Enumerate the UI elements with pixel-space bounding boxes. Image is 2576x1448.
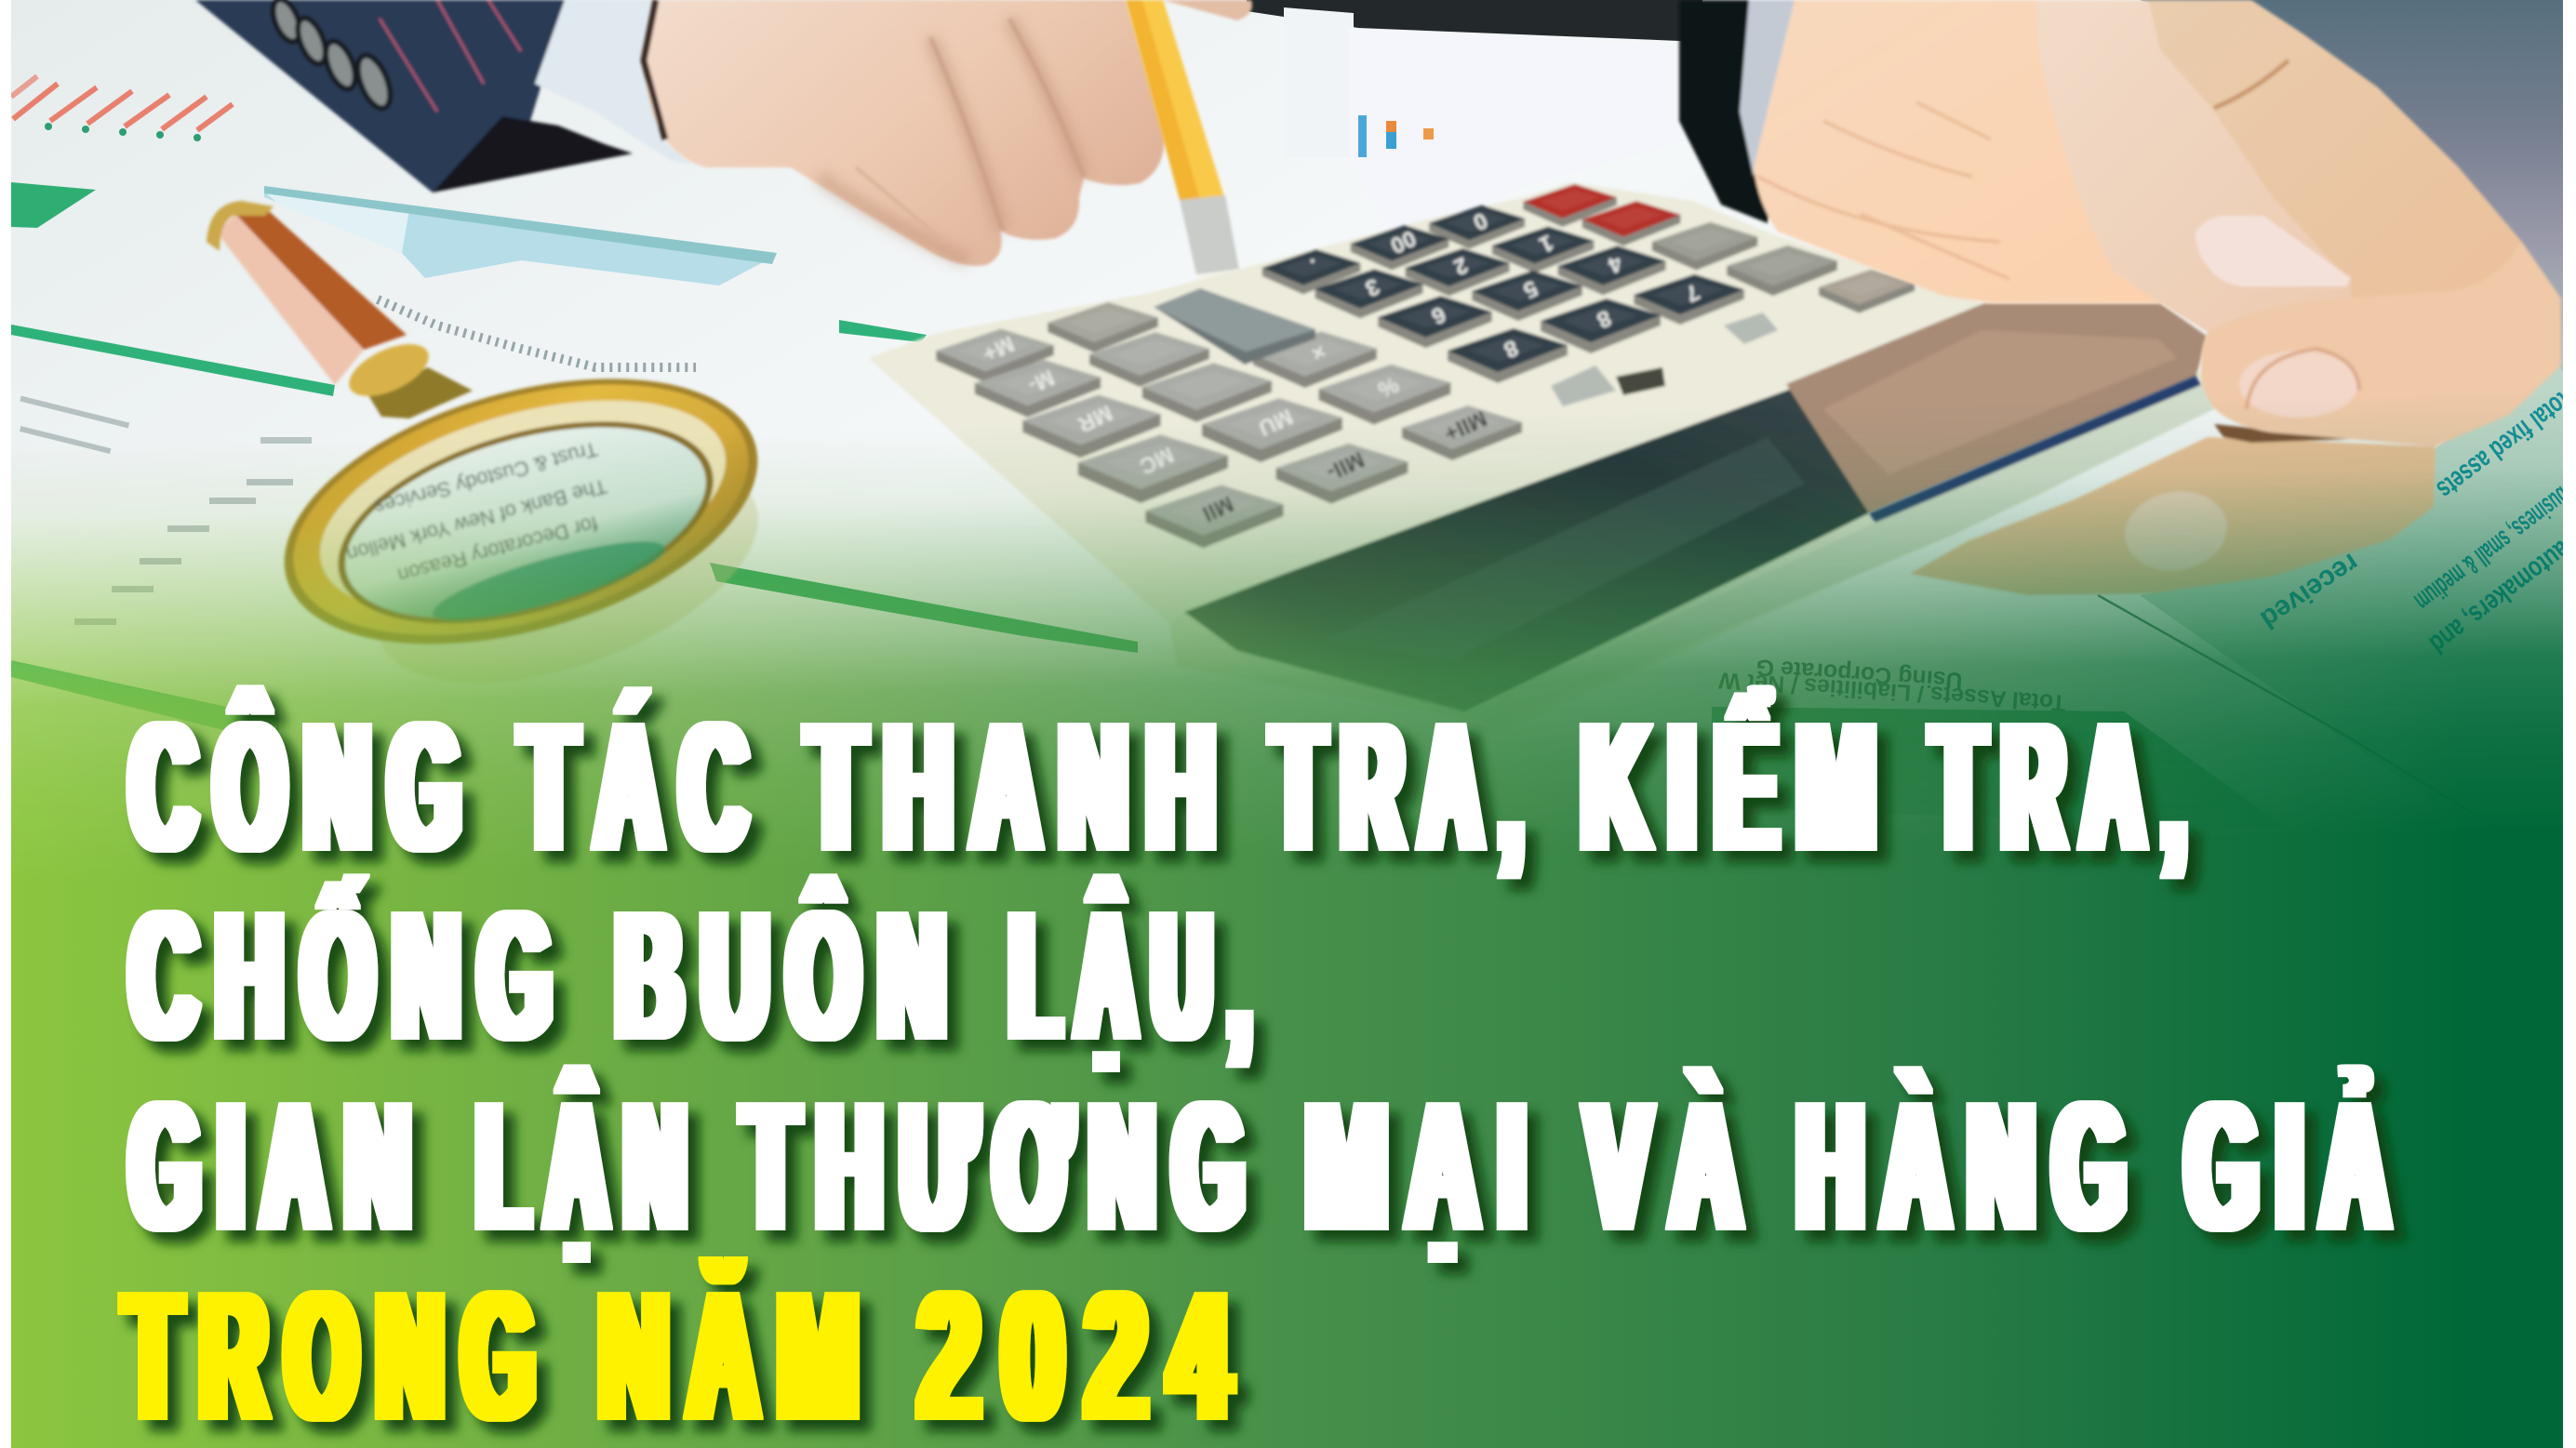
title line 3: HÀNG xyxy=(1797,1064,2144,1269)
corporate table text: Total Assets / Liabilities / Net W xyxy=(1717,667,2066,716)
title line 3 xyxy=(130,1064,2408,1269)
red and green mini bars top-left xyxy=(11,76,233,141)
key labels: . xyxy=(1306,253,1323,278)
finger creases xyxy=(930,19,1084,231)
key labels: 8 xyxy=(1593,305,1615,333)
key labels: MU xyxy=(1255,404,1297,441)
key labels: M- xyxy=(1024,365,1059,398)
jacket pinstripes xyxy=(380,0,521,112)
right paper rotated text: total fixed assets xyxy=(2431,385,2576,505)
blue edge xyxy=(1869,376,2201,523)
title: TRA, xyxy=(1932,684,2204,889)
key labels: 6 xyxy=(1427,301,1449,329)
finger shading xyxy=(819,19,1084,260)
ferrule xyxy=(368,367,473,418)
palm xyxy=(1754,0,2270,316)
key labels: % xyxy=(1374,371,1403,403)
silver edge xyxy=(1465,385,2214,725)
pencil xyxy=(1126,0,1243,307)
lower finger nail xyxy=(2119,484,2233,578)
title line 2: CHỐNG xyxy=(130,874,570,1077)
title line 1 xyxy=(130,684,2204,889)
magnifying glass xyxy=(207,201,788,728)
lens text lines: The Bank of New York Mellon xyxy=(344,474,609,566)
grey area top right xyxy=(2140,0,2563,372)
right paper sheet xyxy=(2140,358,2563,893)
display reflection brown xyxy=(1786,303,2208,513)
top dark desk band xyxy=(1247,0,1702,42)
key labels: MR xyxy=(1074,400,1116,437)
title line 1: TRA, xyxy=(1273,684,1541,889)
display screen xyxy=(1184,388,1869,712)
lens text lines xyxy=(344,437,609,588)
corporate table text: Using Corporate G xyxy=(1755,654,1963,694)
key labels: 2 xyxy=(1449,252,1472,280)
lens text lines: for Decoratory Reason xyxy=(395,511,600,588)
key labels: 1 xyxy=(1535,230,1557,258)
cuff buttons xyxy=(268,0,396,113)
green rule bottom-left xyxy=(11,660,279,744)
palm creases xyxy=(1758,102,2009,279)
handle xyxy=(217,214,364,385)
title line 1: CÔNG xyxy=(130,684,479,889)
translucent lens shadow xyxy=(348,416,787,728)
red keys xyxy=(1523,184,1680,246)
rear finger xyxy=(2148,0,2561,365)
small line chart xyxy=(378,299,696,367)
calculator body xyxy=(868,182,2214,735)
small green tag left xyxy=(11,182,96,228)
key labels xyxy=(979,207,1703,526)
finger gap shadow xyxy=(2214,424,2354,443)
thumb nail xyxy=(2196,216,2351,286)
title line 3: MẠI xyxy=(1306,1064,1546,1269)
middle fingertip nail xyxy=(2239,351,2358,418)
middle finger xyxy=(2201,241,2561,446)
right hand holding calculator xyxy=(1465,0,2561,725)
green rule lower xyxy=(710,563,1138,653)
thumb xyxy=(2036,0,2351,332)
title line 3: LẬN xyxy=(477,1064,703,1269)
key labels: MC xyxy=(1136,442,1178,479)
title line 3: VÀ xyxy=(1586,1064,1761,1269)
title line 1: TÁC xyxy=(521,684,766,889)
grey keys right xyxy=(1652,222,1915,313)
title: LẬU, xyxy=(1010,874,1268,1077)
key labels: MII+ xyxy=(1440,405,1490,446)
right paper rotated text xyxy=(2255,385,2576,659)
left hand holding pencil xyxy=(644,0,1252,266)
title line 1: THANH xyxy=(808,684,1235,889)
key labels: 8 xyxy=(1500,335,1522,363)
title line 3: THƯƠNG xyxy=(743,1064,1262,1269)
glass rim xyxy=(254,330,788,693)
key labels: 5 xyxy=(1519,275,1542,303)
suit sleeve xyxy=(195,0,693,193)
lens text lines: Trust & Custody Services xyxy=(372,437,600,519)
key labels: 4 xyxy=(1604,250,1626,278)
slide switches xyxy=(1724,312,1778,344)
calculator xyxy=(868,182,2220,735)
title xyxy=(125,684,2408,1448)
finger crease xyxy=(2214,60,2289,108)
key labels: 3 xyxy=(1361,273,1383,301)
paper line lower right xyxy=(2098,595,2512,837)
teal column chart xyxy=(264,186,777,286)
lower finger xyxy=(1910,437,2436,595)
key labels: M+ xyxy=(979,330,1018,366)
title line 3: GIAN xyxy=(130,1064,429,1269)
grey figures column xyxy=(20,396,312,625)
body lower shade xyxy=(1169,372,2220,735)
title line 2: BUÔN xyxy=(616,874,965,1077)
green rule left xyxy=(11,325,335,396)
small bar chart on paper xyxy=(1358,115,1434,157)
sleeve xyxy=(1679,0,1800,223)
shadow under cuff xyxy=(433,116,633,193)
dark number keys xyxy=(1262,206,1744,383)
green gradient overlay xyxy=(11,418,2563,1448)
key labels: 00 xyxy=(1386,225,1420,259)
key labels: 7 xyxy=(1681,279,1703,307)
key labels: × xyxy=(1307,339,1329,366)
keypad: grey function keys xyxy=(936,302,1522,548)
title line 1: KIỂM xyxy=(1582,684,1895,889)
chart paper top centre xyxy=(1349,28,1688,242)
green header block lower xyxy=(1712,707,2289,830)
large pressed key xyxy=(1154,288,1315,365)
lens refraction xyxy=(426,526,672,636)
right paper rotated text: business, small & medium xyxy=(2409,480,2576,617)
key labels: 0 xyxy=(1469,207,1491,235)
top paper sheet xyxy=(1284,7,1354,158)
right paper rotated text: automakers, and xyxy=(2423,534,2576,659)
key labels: MII xyxy=(1198,491,1237,526)
key labels: MII- xyxy=(1323,446,1368,485)
right paper rotated text: received xyxy=(2255,547,2365,635)
shirt cuff xyxy=(535,0,693,166)
watch strap xyxy=(644,0,665,139)
green rule middle xyxy=(839,320,927,342)
